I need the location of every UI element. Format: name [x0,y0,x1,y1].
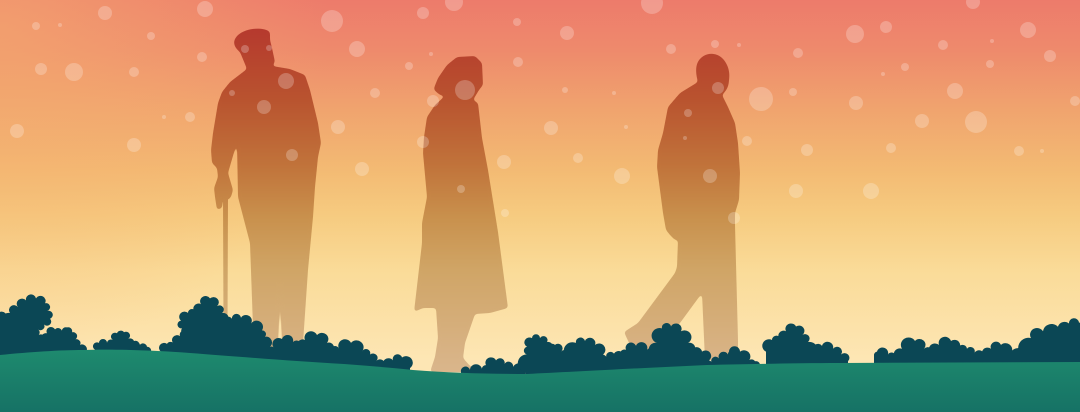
shrub: small left mound [93,331,151,382]
figure: walking man [624,54,740,360]
figure: woman in coat and skirt [414,56,508,372]
shrubs along the horizon [0,294,1080,386]
shrub: far left cluster [0,294,87,382]
shrub: cluster by the walking man [518,323,760,386]
shrub: cluster right of the walking man [762,323,849,382]
shrub: far right hedge [874,318,1080,382]
shrub: large cluster by the cane [159,296,413,382]
grassy hill [0,350,1080,412]
floating light orbs [10,0,1080,224]
shrub: mound by the woman [461,357,525,386]
figure: man with cane [211,29,321,347]
